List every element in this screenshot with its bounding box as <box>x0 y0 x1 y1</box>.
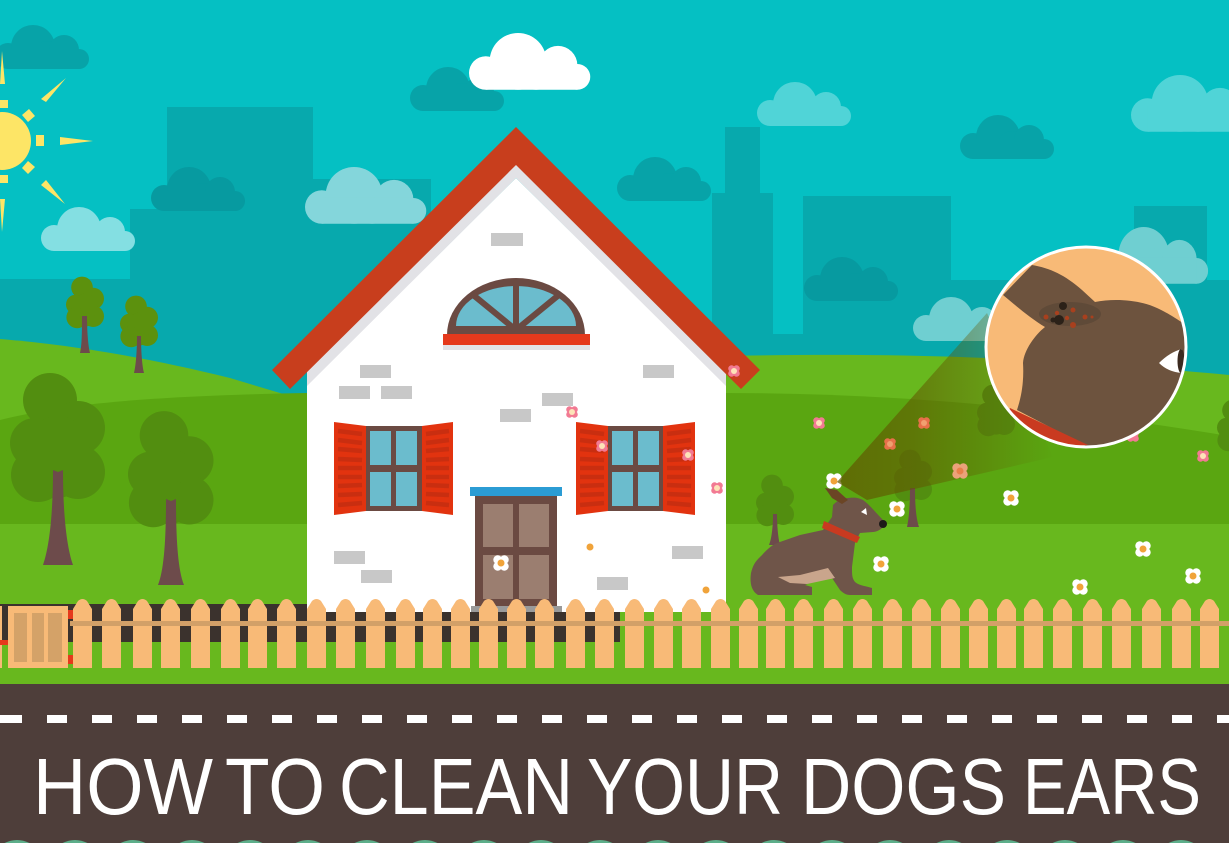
trees <box>10 277 1229 585</box>
dog ear <box>825 488 848 504</box>
dog eye <box>861 508 867 515</box>
background clouds <box>0 25 1229 341</box>
roof shadow <box>307 162 726 386</box>
right window with shutters <box>576 422 695 515</box>
sky <box>0 0 1229 420</box>
picket fence <box>73 599 1219 668</box>
title: YOUR <box>587 742 783 831</box>
dog collar <box>822 521 860 543</box>
roof <box>272 127 760 389</box>
city skyline <box>0 107 1229 409</box>
flowers tinted by the beam <box>884 417 968 479</box>
magnified dog head <box>1003 265 1186 447</box>
wall bricks <box>334 233 703 590</box>
ear mites patch <box>1039 302 1101 328</box>
icon: sun <box>0 51 93 232</box>
dog nose <box>879 520 887 528</box>
arched attic window <box>443 278 590 350</box>
fence rail <box>70 621 1229 626</box>
title <box>33 742 1201 831</box>
road <box>0 684 1229 843</box>
magnified eye <box>1159 349 1184 373</box>
road dashes <box>0 715 1229 723</box>
front door <box>470 487 562 616</box>
house <box>272 127 760 616</box>
title: HOW <box>33 742 213 831</box>
flowers <box>493 365 1209 595</box>
magnified ear callout <box>986 247 1186 447</box>
title: TO <box>225 742 325 831</box>
dog belly <box>778 568 835 584</box>
dog body <box>751 498 883 595</box>
title: DOGS <box>801 742 1006 831</box>
garden gate <box>0 606 73 668</box>
magnifier beam <box>837 313 1053 500</box>
fence back rail <box>0 604 620 642</box>
title: CLEAN <box>339 742 573 831</box>
magnified collar <box>1005 408 1088 447</box>
hills and lawn <box>0 339 1229 684</box>
icon: dog <box>751 488 887 595</box>
left window with shutters <box>334 422 453 515</box>
bottom scallops <box>4 840 1194 843</box>
house wall <box>307 178 726 612</box>
